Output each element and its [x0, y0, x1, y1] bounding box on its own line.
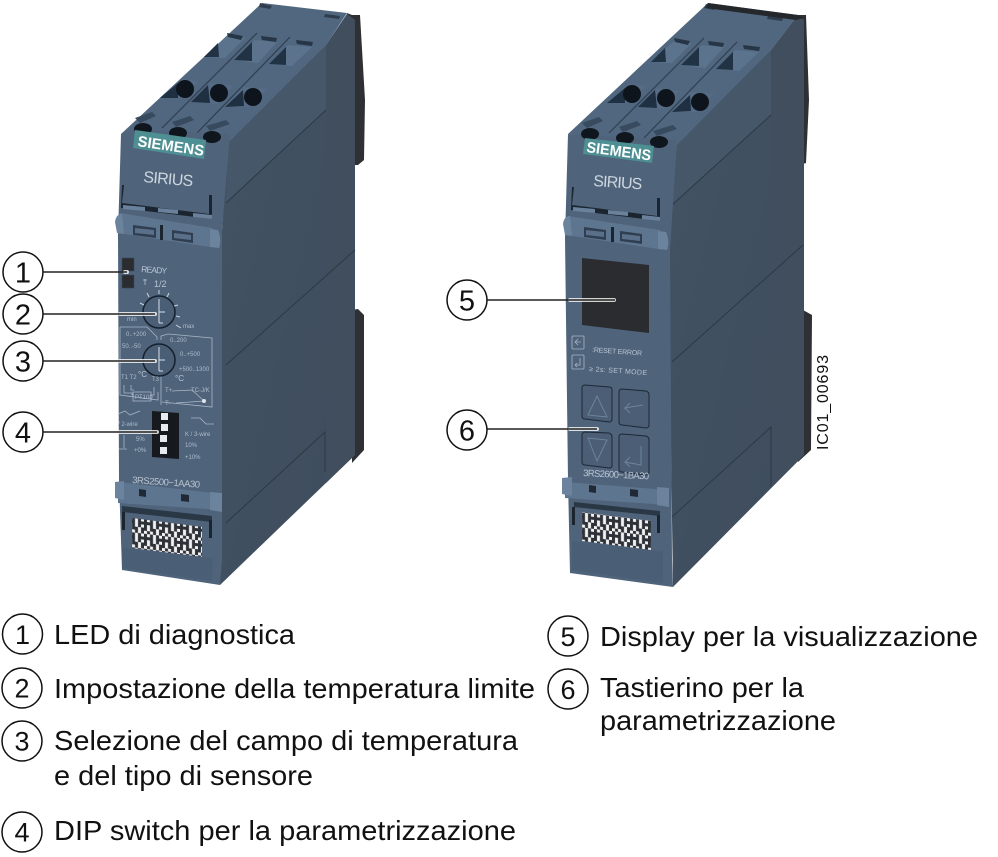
- keypad: [582, 385, 649, 475]
- legend item 6: Tastierino per la: [600, 672, 805, 703]
- DIP switch block: K / 3-wire: [185, 432, 211, 438]
- callout 2: [3, 294, 155, 334]
- dial: range and sensor type: PT100: [135, 395, 153, 401]
- brand label: SIEMENS: [585, 139, 652, 164]
- callout 4: [3, 412, 157, 452]
- display screen: [582, 258, 649, 333]
- dial: range and sensor type: °C: [138, 370, 147, 379]
- callout 3: 3: [15, 346, 31, 378]
- legend item 1: [2, 614, 296, 654]
- data matrix code: [132, 518, 202, 557]
- legend item 6: parametrizzazione: [600, 705, 836, 736]
- terminal openings: [134, 33, 313, 143]
- callout 4: 4: [15, 418, 31, 450]
- callout 2: 2: [15, 300, 31, 332]
- document code: IC01_00693: [815, 355, 832, 450]
- model number: 3RS2500−1AA30: [132, 475, 200, 491]
- top face: [568, 3, 798, 147]
- dial: range and sensor type: [120, 327, 212, 407]
- dial: range and sensor type: 0..200: [170, 338, 187, 344]
- reset and mode legend: ≥ 2s: SET MODE: [589, 366, 648, 377]
- dial: range and sensor type: T1 T2: [121, 375, 137, 381]
- lower hinge: [562, 477, 669, 533]
- side panel: [668, 15, 804, 587]
- dial: range and sensor type: °C: [175, 374, 184, 383]
- callout 5: 5: [459, 286, 475, 318]
- data matrix code: [582, 512, 651, 550]
- legend item 1: 1: [15, 620, 30, 650]
- DIP switch block: +0%: [134, 448, 147, 454]
- dial: limit temperature: min: [127, 317, 137, 323]
- dial: limit temperature: [127, 290, 194, 330]
- terminal openings: [581, 38, 760, 148]
- rear mounting rail: [347, 13, 365, 463]
- side panel: [220, 14, 355, 585]
- legend item 4: DIP switch per la parametrizzazione: [54, 815, 516, 846]
- legend item 3: Selezione del campo di temperatura: [54, 725, 519, 756]
- device: 3RS2500 analog relay: [115, 3, 365, 585]
- legend item 1: LED di diagnostica: [54, 619, 296, 650]
- lower tag: [122, 548, 213, 581]
- model number: 3RS2600−1BA30: [583, 468, 649, 482]
- legend item 2: [2, 668, 535, 708]
- dial: range and sensor type: T+: [165, 388, 173, 394]
- legend item 3: 3: [14, 726, 30, 756]
- front face: [118, 130, 230, 585]
- legend item 5: Display per la visualizzazione: [600, 621, 978, 652]
- LED indicators: 1/2: [154, 279, 167, 289]
- LED indicators: [122, 258, 168, 289]
- DIP switch block: 10%: [185, 443, 198, 449]
- callout 6: 6: [459, 416, 475, 448]
- DIP switch block: / 2-wire: [118, 422, 138, 428]
- callout 5: [447, 280, 615, 320]
- lower hinge: [115, 481, 222, 538]
- dial: range and sensor type: 0..+500: [180, 352, 201, 358]
- legend item 4: 4: [14, 818, 30, 848]
- legend item 5: [548, 616, 978, 656]
- callout 1: 1: [15, 258, 31, 290]
- rear mounting rail: [798, 15, 812, 462]
- brand label: SIEMENS: [136, 133, 205, 160]
- top seams: [162, 33, 290, 133]
- LED indicators: READY: [141, 264, 168, 276]
- upper hinge: [563, 187, 668, 250]
- top face: [121, 3, 347, 143]
- dial: range and sensor type: 0..+200: [126, 332, 147, 338]
- legend item 6: [548, 669, 836, 736]
- front face: [565, 134, 677, 587]
- dial: limit temperature: max: [183, 324, 194, 330]
- legend item 2: Impostazione della temperatura limite: [54, 673, 535, 704]
- dial: range and sensor type: 50..-50: [122, 344, 141, 350]
- reset and mode legend: :RESET ERROR: [592, 347, 642, 357]
- legend item 4: [2, 812, 516, 852]
- upper hinge: [115, 185, 220, 248]
- product name: SIRIUS: [143, 169, 194, 190]
- legend item 6: 6: [560, 675, 576, 705]
- dial: range and sensor type: TC-J/K: [191, 388, 210, 394]
- reset and mode legend: [572, 336, 648, 377]
- DIP switch block: [118, 411, 214, 461]
- callout 1: [3, 252, 127, 292]
- DIP switch block: 5%: [136, 437, 145, 443]
- dial: range and sensor type: +500..1300: [179, 367, 210, 373]
- device: 3RS2600 display relay: [562, 3, 812, 587]
- legend item 3: e del tipo di sensore: [54, 760, 313, 791]
- top seams: [609, 38, 737, 138]
- dial: range and sensor type: T-: [165, 401, 170, 407]
- legend item 2: 2: [14, 674, 30, 704]
- lower tag: [572, 541, 663, 583]
- callout 3: [3, 341, 155, 381]
- DIP switch block: +10%: [185, 455, 201, 461]
- legend item 3: [2, 721, 519, 791]
- legend item 5: 5: [560, 622, 576, 652]
- callout 6: [447, 410, 597, 450]
- product name: SIRIUS: [593, 173, 643, 193]
- dial: range and sensor type: T3: [152, 377, 160, 383]
